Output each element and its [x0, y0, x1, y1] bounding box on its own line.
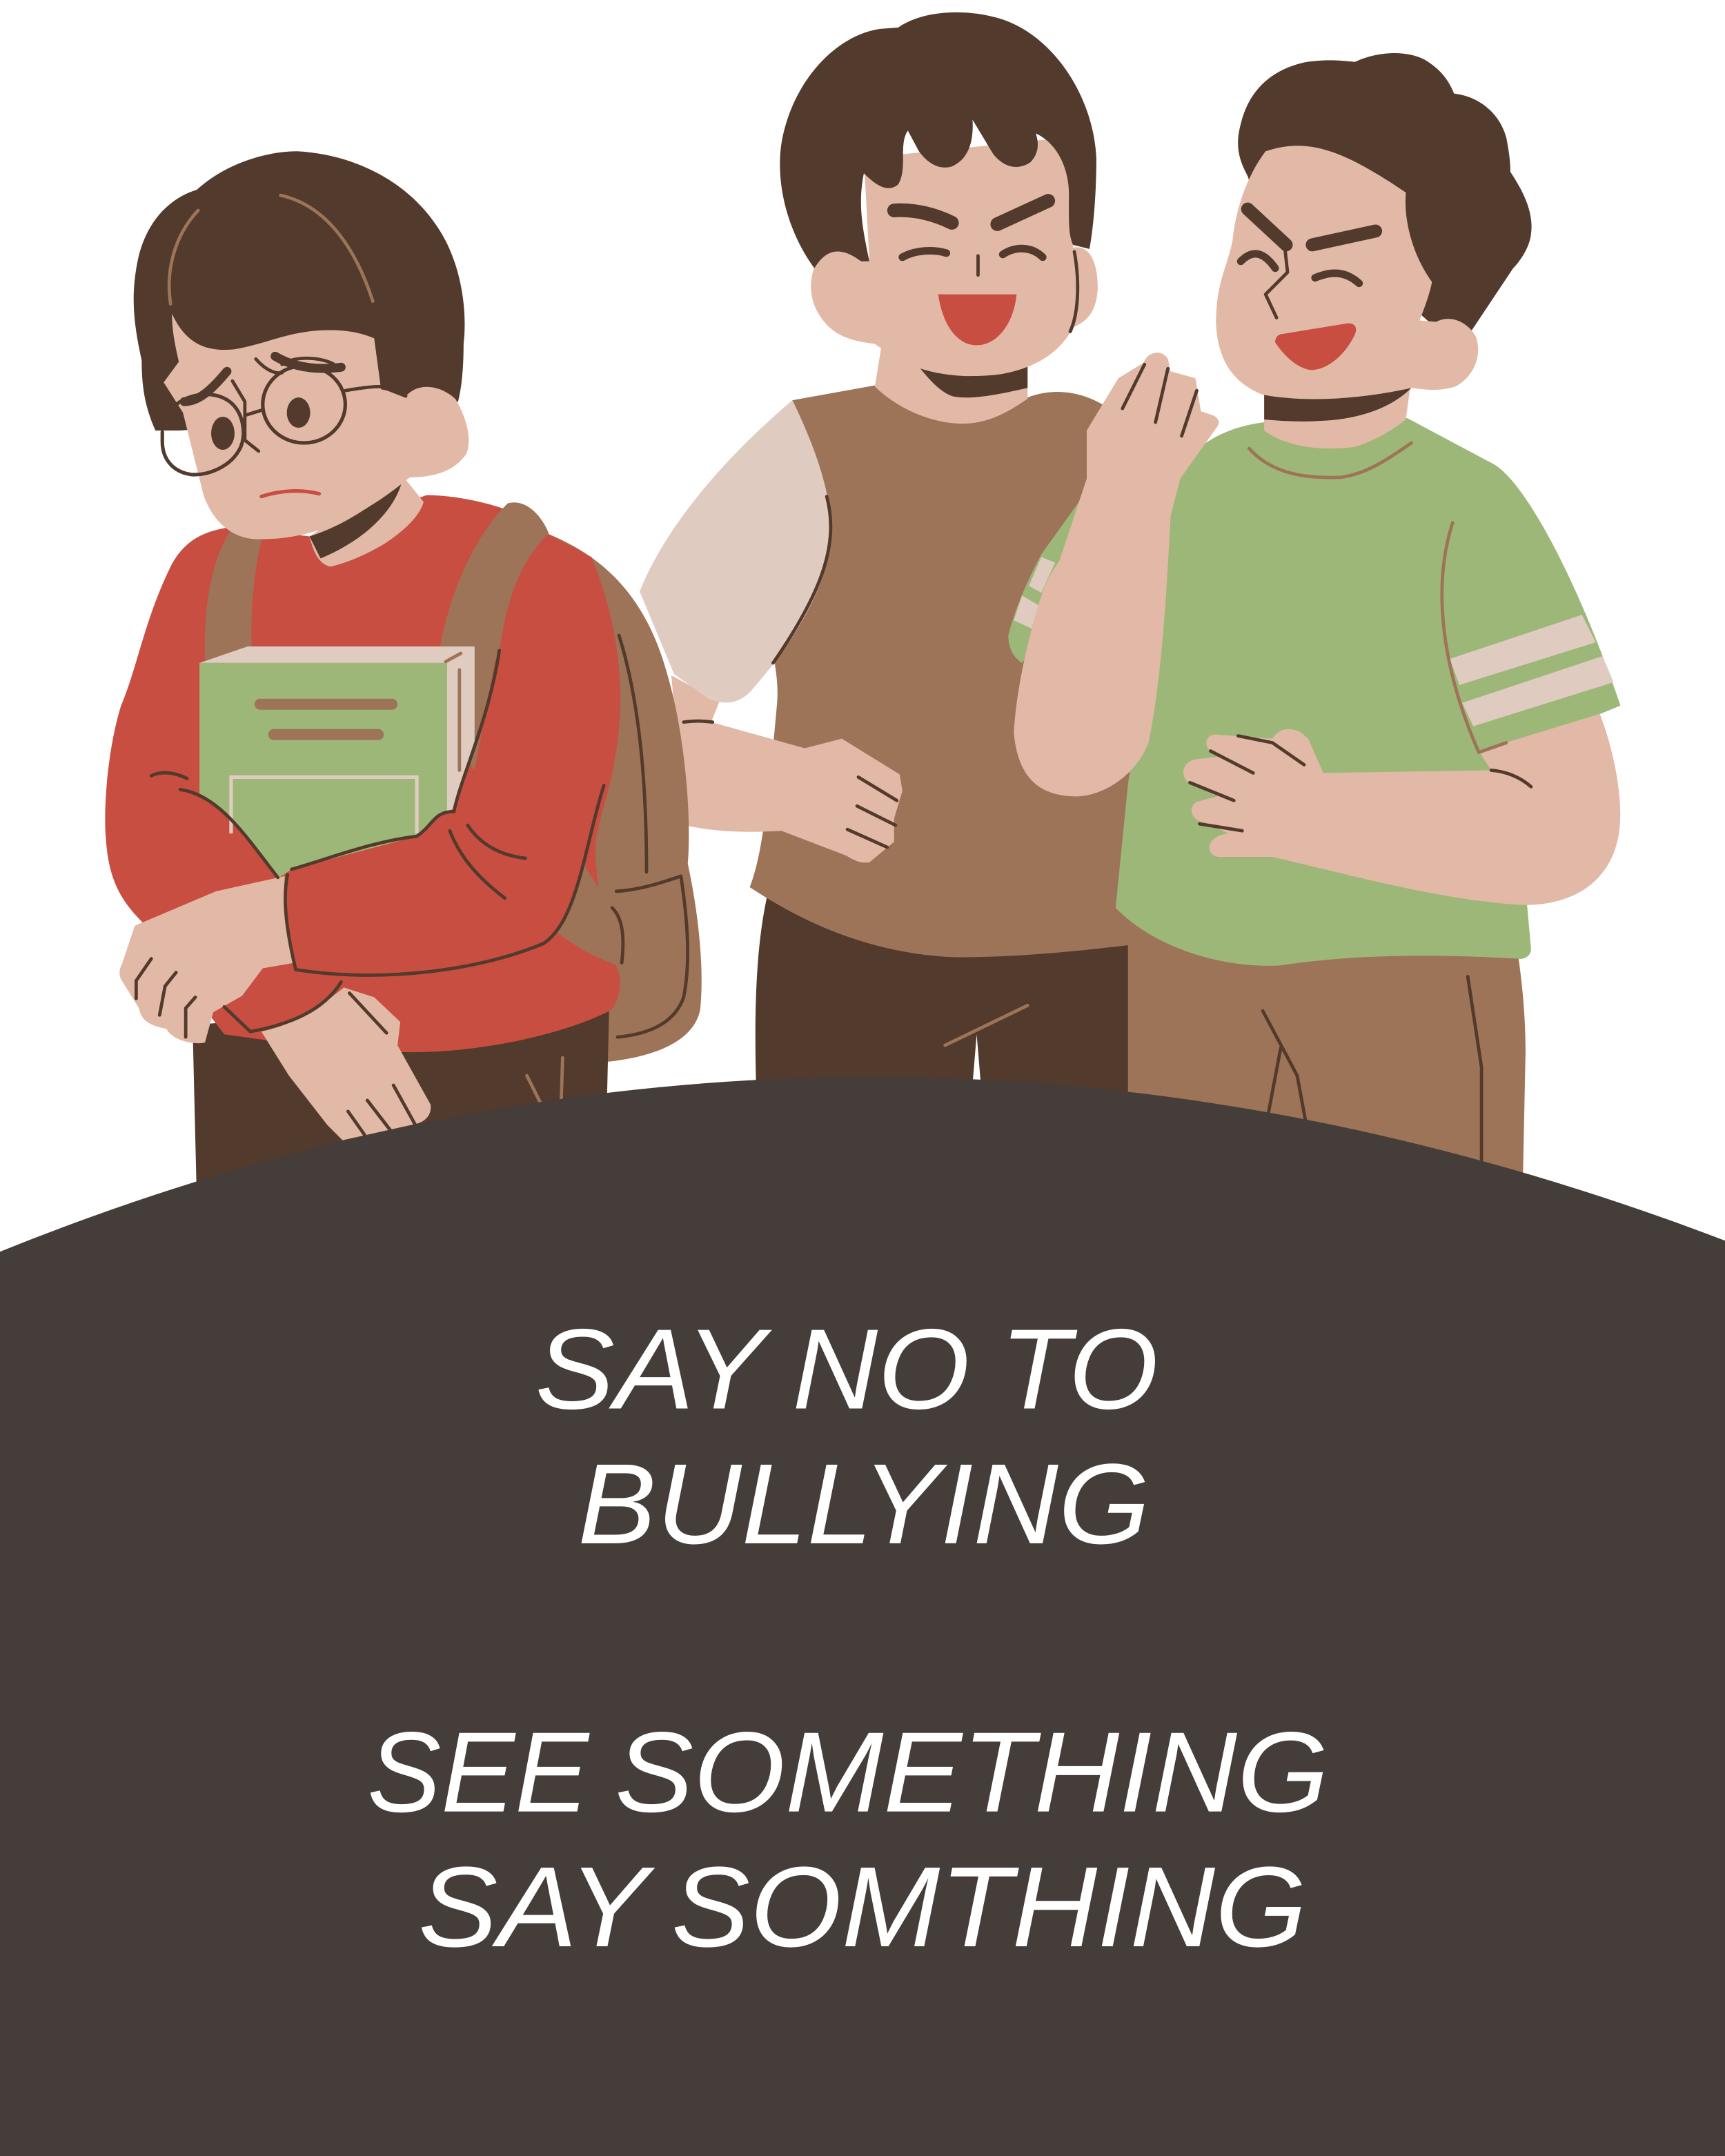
face: left boy: [164, 314, 469, 540]
sleeve and fist lines: [684, 497, 897, 847]
sleeve: middle boy near arm: [640, 400, 831, 702]
vest crease: [945, 1005, 1027, 1045]
neck: right boy: [1264, 378, 1411, 448]
bridge and temple: [233, 381, 406, 451]
left lens: [162, 395, 244, 475]
ear line: [1070, 252, 1078, 331]
backpack wedge: [557, 864, 618, 966]
book title bars: [260, 702, 392, 707]
left hand and forearm: [119, 876, 295, 1043]
slogan: see something say somthing: SOMETHING: [615, 1709, 1329, 1837]
book: [199, 646, 475, 878]
page lines: [446, 653, 461, 662]
slogan: see something say somthing: SOMTHING: [671, 1843, 1307, 1971]
pants: middle boy: [756, 880, 1135, 1100]
glasses: [162, 366, 406, 475]
bottom dark panel: [0, 1077, 1725, 2156]
character: right boy: [1014, 53, 1620, 1183]
face: right boy: [1216, 146, 1478, 399]
character: left boy: [105, 151, 702, 1196]
neck shadow: [310, 483, 402, 558]
vest: [750, 385, 1142, 958]
pants lines left boy: [527, 1058, 562, 1103]
brows: right boy: [1248, 209, 1376, 245]
book cover: [199, 663, 447, 878]
backpack strap left: [205, 530, 262, 660]
arm lines: right boy: [1190, 736, 1531, 831]
brows: middle boy: [894, 201, 1048, 224]
face: middle boy: [811, 137, 1098, 376]
nose: middle boy: [977, 256, 979, 275]
headline: say no to bullying: BULLYING: [578, 1441, 1150, 1568]
pants: right boy: [1128, 922, 1526, 1183]
raised arm and hand: [1014, 353, 1219, 796]
book label frame: [231, 777, 417, 833]
character: middle boy: [640, 12, 1142, 1100]
sweater arm: [292, 660, 620, 979]
sleeve seam: [1442, 523, 1506, 753]
neck: left boy: [310, 475, 424, 566]
headline: say no to bullying: SAY: [535, 1305, 773, 1433]
sweater: [105, 495, 620, 1052]
neck shadow: [1264, 388, 1411, 422]
pants lines: [1263, 976, 1481, 1163]
eyes: left boy: [211, 417, 235, 450]
right lens: [263, 366, 345, 443]
hand lines: [136, 959, 415, 1135]
collar line: [1249, 443, 1411, 477]
backpack: [547, 534, 702, 1062]
mouth: middle boy: [938, 295, 1016, 345]
hair: middle boy: [780, 12, 1096, 268]
sleeve: middle boy far arm: [1008, 491, 1101, 663]
hair highlight lines: [169, 195, 373, 304]
pants: left boy: [193, 997, 609, 1196]
neck shadow: [920, 366, 1027, 397]
backpack strap right: [439, 502, 549, 770]
neck: middle boy: [875, 344, 1027, 424]
finger lines: [1123, 364, 1196, 436]
closed eyes: right boy: [1241, 254, 1359, 284]
mouth: right boy: [1275, 324, 1356, 370]
brow wrinkles: [256, 358, 334, 373]
arm and fist: middle boy: [671, 675, 903, 862]
right hand: [262, 987, 431, 1140]
headline: say no to bullying: TO: [1000, 1305, 1159, 1433]
hair: left boy: [134, 151, 464, 431]
headline: say no to bullying: NO: [792, 1305, 970, 1433]
nose: right boy: [1265, 248, 1288, 318]
t-shirt: [1116, 418, 1620, 966]
slogan: see something say somthing: SEE: [367, 1709, 590, 1837]
hair: right boy: [1238, 53, 1532, 330]
sweater lines: [151, 651, 604, 1031]
brows: left boy: [184, 356, 341, 402]
closed eyes: middle boy: [903, 248, 1043, 257]
headline: say no to bullying: [535, 1305, 1159, 1568]
backpack lines: [612, 635, 688, 1037]
slogan: see something say somthing: [367, 1709, 1329, 1971]
sleeve stripes: [1450, 615, 1614, 726]
arm and hand: right boy: [1183, 714, 1620, 905]
sleeve stripes: [1014, 557, 1055, 629]
slogan: see something say somthing: SAY: [418, 1843, 656, 1971]
mouth: left boy: [262, 491, 319, 497]
book pages: [199, 646, 475, 833]
